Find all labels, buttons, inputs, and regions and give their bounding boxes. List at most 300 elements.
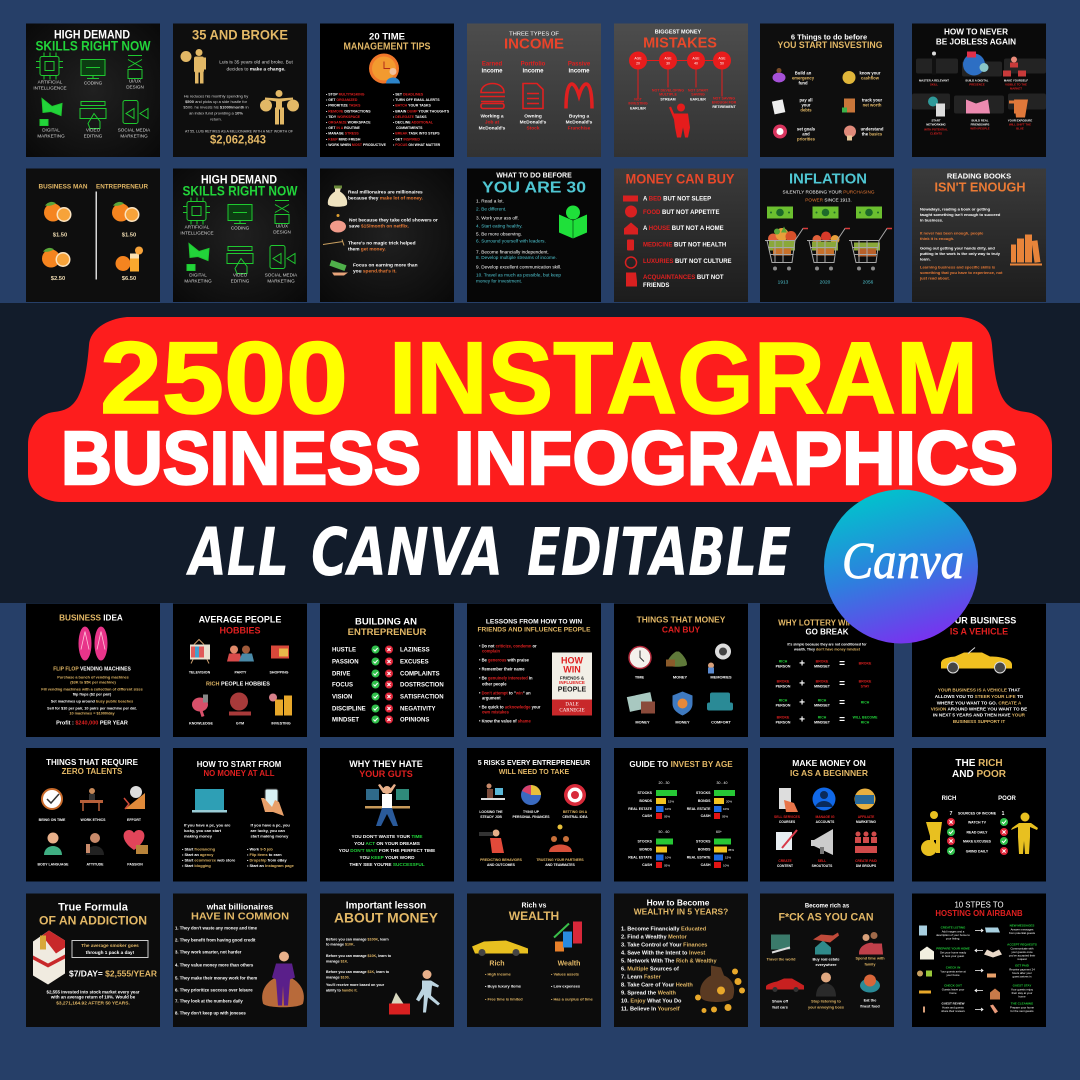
text block: bad traits: COMPLAINTS [400,672,440,678]
equation rows: = [839,714,845,726]
column: portfolio income: income [522,68,544,74]
icon: book cover: CARNEGIE [559,708,585,714]
text block: right tips: • BATCH YOUR TASKS [393,104,431,108]
text block: lessons: • Know the value of shame [479,718,531,724]
heading: IG AS A BEGINNER [790,768,868,778]
item: cars: Show off [772,1000,789,1004]
text block: skill labels: MARKETING [267,278,295,284]
panel: Guide to invest by age [614,748,748,882]
column: portfolio income [520,62,547,132]
item: real estate: everywhere [816,963,836,967]
equation rows: BROKE [777,680,790,684]
callout box: The average smoker goes [81,943,139,948]
text block: top labels: MAKE YOURSELF [1004,78,1028,82]
column: portfolio income: McDonald's [520,120,547,126]
heading: HAVE IN COMMON [191,912,289,922]
column: passive income: Franchise [568,126,591,132]
icon row: right icons [842,71,856,140]
text block: plan: $500. he invests his $1000/month in [183,104,249,110]
text block: top labels: SKILL [930,82,938,86]
bar chart: 30-40: STOCKS [696,791,711,795]
text block: left column: making money [184,834,213,838]
text block: mistakes: MULTIPLE [659,92,677,96]
big number: $2,062,843 [210,134,266,146]
equation rows: + [799,714,805,726]
text block: good traits: DRIVE [332,672,350,678]
text block: statements: THEY SEE YOU'RE SUCCESSFUL [349,862,425,867]
item: create content: CREATE [778,859,792,863]
equation rows: MINDSET [814,664,831,668]
item: create content: CONTENT [777,864,793,868]
step column: left: your home [946,973,960,977]
risk: steady job: STEADY JOB [480,815,502,819]
year labels: 2056 [863,280,874,286]
equation rows: = [839,678,845,690]
step column: right: ACCEPT REQUESTS [1007,942,1037,946]
text block: description: VISION AROUND WHERE YOU WANT TO BE [931,706,1027,712]
item: paid DM groups [855,832,878,868]
heading: MISTAKES [643,36,717,52]
step column: right: hours after your [1012,971,1032,975]
text block: right items: track your [862,98,882,102]
text block: list: 8. They don't keep up with joneses [175,1010,246,1016]
equation rows: PERSON [776,720,791,724]
icon: orange top right [112,202,140,222]
equation rows: BROKE [777,716,790,720]
comparison table: READ DAILY [966,830,988,834]
text block: point 4: you spend.that's it. [353,268,397,274]
step column: left: CHECK IN [946,966,960,970]
step column: left: your listing. [946,936,960,940]
heading: WHY THEY HATE [349,759,423,769]
column: rich: • High income [485,972,512,976]
text block: list: 5. They make their money work for them [175,976,257,980]
panel: Why lottery winners go break [760,604,894,737]
panel: 6 things before investing [760,24,894,157]
text block: right column: start making money [250,834,289,838]
text block: right items: know your [860,70,881,76]
risk: trusting partners [536,824,584,867]
step column: right: Answer messages [1011,928,1034,932]
heading: AND POOR [952,769,1007,780]
text block: skill labels: VIDEO [86,128,101,132]
text block: bad traits: OPINIONS [400,718,429,724]
text block: right column [247,822,295,868]
timeline: AGE [664,56,672,60]
text block: top labels: MARKET [1010,86,1022,90]
text block: bottom labels: FRIENDSHIPS [971,122,990,126]
bar chart: 30-40: 20% [726,800,732,804]
heading [942,616,1016,636]
text block: skill labels: DESIGN [126,84,144,90]
heading [778,904,874,924]
panel: Real millionaires [320,168,454,302]
text block: list: money for investment. [476,278,522,284]
text block: paragraphs: think it is enough. [920,236,954,241]
text block: subtitle: POWER SINCE 1913. [805,198,852,202]
bar chart: 50-60: 05% [664,864,670,868]
risk: central idea: CENTRAL IDEA [562,815,588,819]
banner background [0,303,1080,603]
heading: WHAT TO DO BEFORE [496,172,572,180]
column: rich: • Buys luxury items [485,984,521,988]
text block: steps: 2. Find a Wealthy Mentor [621,934,688,940]
text block: point 1 [348,190,423,202]
text block: left tips: • PRIORITIZE TASKS [326,104,361,108]
title line 2: INFOGRAPHICS [454,416,1018,500]
icon: money bag with coins [695,966,745,1013]
equation rows: MINDSET [814,704,831,708]
talent: work ethics: WORK ETHICS [81,818,106,822]
text block: skill labels: UI/UX [129,78,141,84]
heading: WHY LOTTERY WINNERS [778,618,876,628]
year labels: 1913 [778,280,789,286]
step column: right: NEW MESSAGES [1010,924,1034,928]
equation rows [776,658,878,726]
title line 1: 2500 [100,321,348,435]
heading [509,902,559,923]
text block: bottom labels: BLUE [1016,126,1024,130]
text block: lessons [326,938,392,992]
equation rows: RICH [861,720,870,724]
text block: bottom labels: CLIENTS [930,132,942,136]
heading: How to Become [647,898,710,908]
icons: checks [372,646,380,724]
risk: personal finances [512,785,550,819]
title line 1: INSTAGRAM [389,321,978,435]
text block: intro: It's simple because they are not conditioned for [787,642,867,646]
title line 2: BUSINESS [61,416,421,500]
subtitle [185,514,791,591]
text block: skill labels: CODING [84,80,103,86]
text block: bottom labels: WITH POTENTIAL [924,128,948,132]
icon: bar chart and arrow [554,922,582,952]
text block: skill labels: SOCIAL MEDIA [265,272,298,278]
heading [936,28,1016,46]
column: rich [485,960,523,1002]
text block: description: IN NEXT 5 YEARS AND THEN HAVE YOUR [933,712,1026,718]
icon: orange lower left [42,248,70,268]
timeline: 50 [720,62,724,66]
column: rich: Rich [489,960,505,968]
text block: list: 1. Read a lot. [476,198,504,204]
item: sell shoutouts: SHOUTOUTS [812,864,833,868]
text block: description: YOUR BUSINESS IS A VEHICLE THAT [938,688,1020,692]
text block: list: MEDICINE BUT NOT HEALTH [643,242,726,248]
text block: steps: 7. Learn Faster [621,974,662,980]
text block: steps: 4. Save With the Intent to Invest [621,950,705,956]
equation rows: BROKE [859,662,872,666]
text block: left tips: • TIDY WORKSPACE [326,115,361,119]
text block: good traits: FOCUS [332,682,353,688]
panel: Reading books isn't enough [912,168,1046,302]
text block: mistakes: NOT DEVELOPING [652,88,684,92]
text block: mistakes: NOT SAVING [713,96,735,100]
heading: what billionaires [206,902,274,912]
icon: book cover: INFLUENCE [559,680,585,685]
text block: bad traits: DOSTRSCTION [400,682,444,688]
panel: 10 steps to hosting on Airbnb [912,894,1046,1027]
hobby: gym: GYM [236,722,244,726]
panel: What billionaires have in common [173,894,307,1027]
text block: right column: If you have a pc, you [250,822,290,828]
talent: being on time: BEING ON TIME [39,818,66,822]
bar chart: 20-30: CASH [642,814,652,818]
text block: lessons: ability to handle it. [326,988,358,992]
item: sell courses: COURSES [779,820,796,824]
item: money: MONEY [673,674,688,680]
heading: 10 STPES TO [954,900,1004,910]
text block: left tips [326,92,387,147]
text block: top labels: PRESENCE [969,82,985,86]
text block: lessons: argument [482,696,501,700]
icon group: skills [36,52,148,128]
risk: personal finances: PERSONAL FINANCES [512,815,550,819]
bar chart: 60+: CASH [701,863,711,867]
text block: list: A BED BUT NOT SLEEP [643,196,711,202]
heading: FRIENDS AND INFLUENCE PEOPLE [478,626,591,634]
panel: Rich vs wealth [467,894,601,1027]
equation rows: BROKE [816,680,829,684]
text block: idea details: Purchase a bunch of vending machines [57,676,129,680]
icon: man with money bag [180,49,206,84]
text block: lessons [479,644,541,724]
heading [39,902,147,928]
text block: list: 2. They benefit from having good credit [175,938,256,942]
text block: point 4: Focus on earning more than [353,262,418,268]
comparison table: GRIND DAILY [966,850,989,854]
heading: Important lesson [346,900,426,912]
bar chart: 30-40: 10% [723,807,729,811]
text block: paragraphs: taught something isn't enough to succeed [920,212,1001,217]
text block: lessons: Before you can manage $1K, learn to [326,970,390,974]
text block: right tips: • SET DEADLINES [393,92,424,96]
item: cars: fast cars [772,1006,788,1010]
column: earned income: McDonald's [479,126,506,132]
heading [778,618,876,636]
text block: lessons: to manage $10K. [326,942,355,946]
panel: The rich and poor [912,748,1046,882]
item: manage accounts [812,788,836,824]
heading: INFLATION [789,170,867,188]
heading: F*CK AS YOU CAN [778,912,874,924]
text block: skill labels: DIGITAL [42,128,60,132]
talent: passion: PASSION [127,862,143,866]
heading [482,172,586,196]
heading [790,758,868,778]
heading: GO BREAK [805,628,849,636]
text block: lessons: own mistakes [482,710,510,714]
text block: good traits: MINDSET [332,718,359,724]
text block: steps: 5. Network With The Rich & Wealthy [621,958,717,964]
panel: How to never be jobless again [912,24,1046,157]
bar chart: 60+: BONDS [698,848,711,852]
text block: list: A HOUSE BUT NOT A HOME [643,226,724,232]
text block: idea details: 10 machines = $1000/day [69,712,116,716]
step column: left [936,926,970,1013]
step column: right: GET PAID [1015,964,1030,968]
icon: green book [559,206,587,238]
text block: idea details: Set machines up around busy public beaches [51,700,133,704]
text block: skill labels: MARKETING [120,134,148,138]
item: money (shield): MONEY [675,720,690,724]
panel: Why they hate your guts [320,748,454,882]
text block: mistakes: RETIREMENT [712,105,736,109]
text block: right tips: • GET INSPIRED [393,137,420,141]
item: manage accounts: ACCOUNTS [816,820,835,824]
text block: left tips: • WORK WHEN MOST PRODUCTIVE [326,143,387,147]
text block: bottom labels: WILL SHIFT THE [1009,122,1031,126]
year labels: 2020 [820,280,831,286]
bar chart: 60+: 60+ [716,830,722,834]
text block: lessons: • Remember their name [479,666,525,672]
item: paid DM groups: CREATE PAID [855,859,878,863]
heading [634,898,728,916]
step column: left: Hosts and guests [942,1006,964,1010]
heading: THINGS THAT REQUIRE [46,758,139,767]
heading: ZERO TALENTS [62,767,123,776]
heading: HOSTING ON AIRBANB [935,909,1023,918]
column: earned income: Working a [480,114,504,120]
bar chart: 60+: 10% [723,864,729,868]
bar chart: 50-60: STOCKS [637,840,653,844]
text block: list [643,196,732,289]
text block: right tips: • DELEGATE TASKS [393,115,427,119]
text block: description: BUSINESS SUPPORT IT [953,719,1005,724]
timeline: AGE [634,56,642,60]
bar chart: 50-60: BONDS [639,848,653,852]
step column: right: THE CLEANING [1011,1002,1034,1006]
text block: left tips: • REMOVE DISTRACTIONS [326,109,371,113]
column: passive income: McDonald's [566,120,593,126]
column: passive income: income [568,68,590,74]
text block: lessons: other people [482,682,507,686]
text block: bottom labels: NETWORKING [926,122,946,126]
item: family: Spend time with [855,956,885,960]
heading: 35 AND BROKE [192,26,288,42]
heading: YOUR BUSINESS [942,616,1016,626]
text block: list: FOOD BUT NOT APPETITE [643,210,719,216]
heading [952,758,1007,780]
item: food [860,974,880,1008]
bar chart: 20-30: STOCKS [637,791,653,795]
column: wealth: • Has a surplus of time [551,996,594,1002]
panel: True formula of an addiction [26,894,160,1027]
equation rows: WILL BECOME [853,716,878,720]
item: sell shoutouts [811,829,833,868]
equation rows: BROKE [816,660,829,664]
text block: steps: 11. Believe In Yourself [621,1006,680,1012]
hobby: investing: INVESTING [271,722,291,726]
item: manage accounts: MANAGE IG [815,815,835,819]
heading [46,758,139,776]
item: create content [776,830,797,868]
bar chart: 60+: 35% [728,848,734,852]
comparison table: SOURCES OF INCOME [958,812,997,816]
panel: Make money on IG [760,748,894,882]
bar chart: 50-60: 50 - 60 [659,830,669,834]
text block: outcome: AT 55, LUIS RETIRES AS A MILLIONAIRE WITH A NET WORTH OF [185,130,294,134]
text block: statements: YOU DON'T WAIT FOR THE PERFECT TIME [339,848,435,853]
heading: HIGH DEMAND [201,174,277,186]
step column: left: share their reviews [941,1009,965,1013]
item: money (travel): MONEY [635,720,650,724]
risk: steady job [479,784,505,819]
text block: left items [792,70,816,142]
column: earned income: Job at [485,120,499,126]
text block: bad traits: SATISFACTION [400,694,444,700]
text block: steps [621,926,717,1012]
heading [197,760,281,778]
talent: effort: EFFORT [127,818,142,822]
step column: right: Communicate with [1010,946,1034,950]
text block: skill labels: EDITING [84,134,103,138]
heading: CAN BUY [662,624,700,634]
heading: WILL NEED TO TAKE [499,769,570,776]
step column: right [1007,924,1037,1013]
text block: subtitle [783,190,875,202]
column: earned income: income [481,68,503,74]
item: memories: MEMORIES [710,674,732,680]
icon: magic wand [323,240,344,246]
text block: idea details: flip flops ($2 per pair) [73,692,112,696]
item: comfort: COMFORT [711,720,731,724]
comparison table: 7 [950,811,953,817]
text block: bottom labels: WITH PEOPLE [970,126,990,130]
text block: bad traits: LAZINESS [400,648,430,654]
icon: book cover: WIN [563,664,581,674]
icon: flip flops [78,626,108,660]
text block: point 3: There's no magic trick helped [348,240,416,246]
step column: right: request [1017,957,1027,961]
heading [349,759,423,779]
timeline: AGE [692,56,700,60]
equation rows: + [799,678,805,690]
heading: ENTREPRENEUR [96,184,148,190]
text block: lessons: • Be genuinely interested in [479,676,533,680]
text block: mistakes: EARLIER [630,106,646,110]
heading [637,614,726,634]
text block: bad traits: NEGATIVITY [400,706,436,712]
text block: steps: 9. Spread the Wealth [621,990,677,996]
text block: left items: priorities [797,136,816,142]
text block: left items: Build an [795,70,812,76]
text block: mistakes: SAVING [691,92,705,96]
heading: Become rich as [805,904,850,910]
text block: list: 6. Surround yourself with leaders. [476,238,546,244]
text block: point 2: save $15/month on netflix. [349,224,409,230]
item: sell courses [774,788,801,824]
icon: man on money bag [262,952,304,1007]
step column: left: description of your home to [936,933,970,937]
text block: left items: pay all [799,98,813,102]
text block: plan [183,94,249,122]
text block: list: 2. Be different. [476,206,506,212]
item: paid DM groups: DM GROUPS [856,864,877,868]
bar chart: 30-40: 05% [722,814,728,818]
heading [182,174,298,198]
text block: list: 10. Travel as much as possible, but keep [476,272,561,278]
price labels: $6.50 [122,276,136,282]
text block: statements: YOU ACT ON YOUR DREAMS [354,841,420,846]
step column: right: Your guests enjoy [1011,988,1034,992]
divider [96,192,97,280]
text block: left items: debts [800,108,812,112]
timeline: AGE [718,56,726,60]
text block: steps: 8. Take Care of Your Health [621,982,693,988]
icon: piggy bank [330,214,346,232]
heading [348,616,426,638]
